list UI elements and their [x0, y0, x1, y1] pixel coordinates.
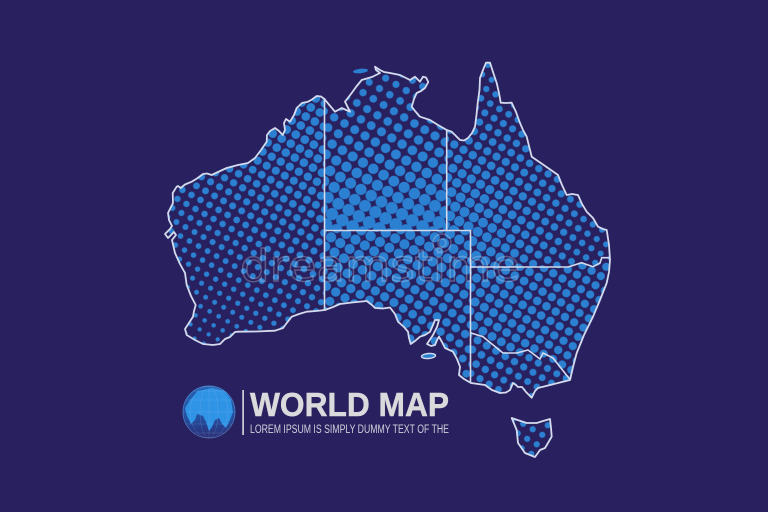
- region: Tasmania dots: [513, 420, 550, 456]
- region: Western Australia dots: [168, 97, 324, 344]
- subtitle: LOREM IPSUM IS SIMPLY DUMMY TEXT OF THE: [250, 424, 449, 436]
- Tasmania outline: [512, 418, 552, 457]
- region: Queensland dots: [448, 64, 609, 266]
- state borders: [324, 98, 610, 383]
- map: Australia halftone: [150, 55, 616, 459]
- divider line: [242, 390, 244, 435]
- icon: globe: [182, 386, 236, 438]
- watermark: dreamstime: [240, 241, 520, 292]
- mainland coastline: [165, 63, 610, 398]
- title: WORLD MAP: [250, 387, 449, 424]
- Melville Island: [353, 68, 368, 74]
- region: Victoria dots: [471, 334, 565, 396]
- region: Northern Territory dots: [324, 60, 447, 231]
- region: New South Wales dots: [471, 258, 610, 378]
- Kangaroo Island: [421, 353, 436, 359]
- region: South Australia dots: [324, 230, 471, 390]
